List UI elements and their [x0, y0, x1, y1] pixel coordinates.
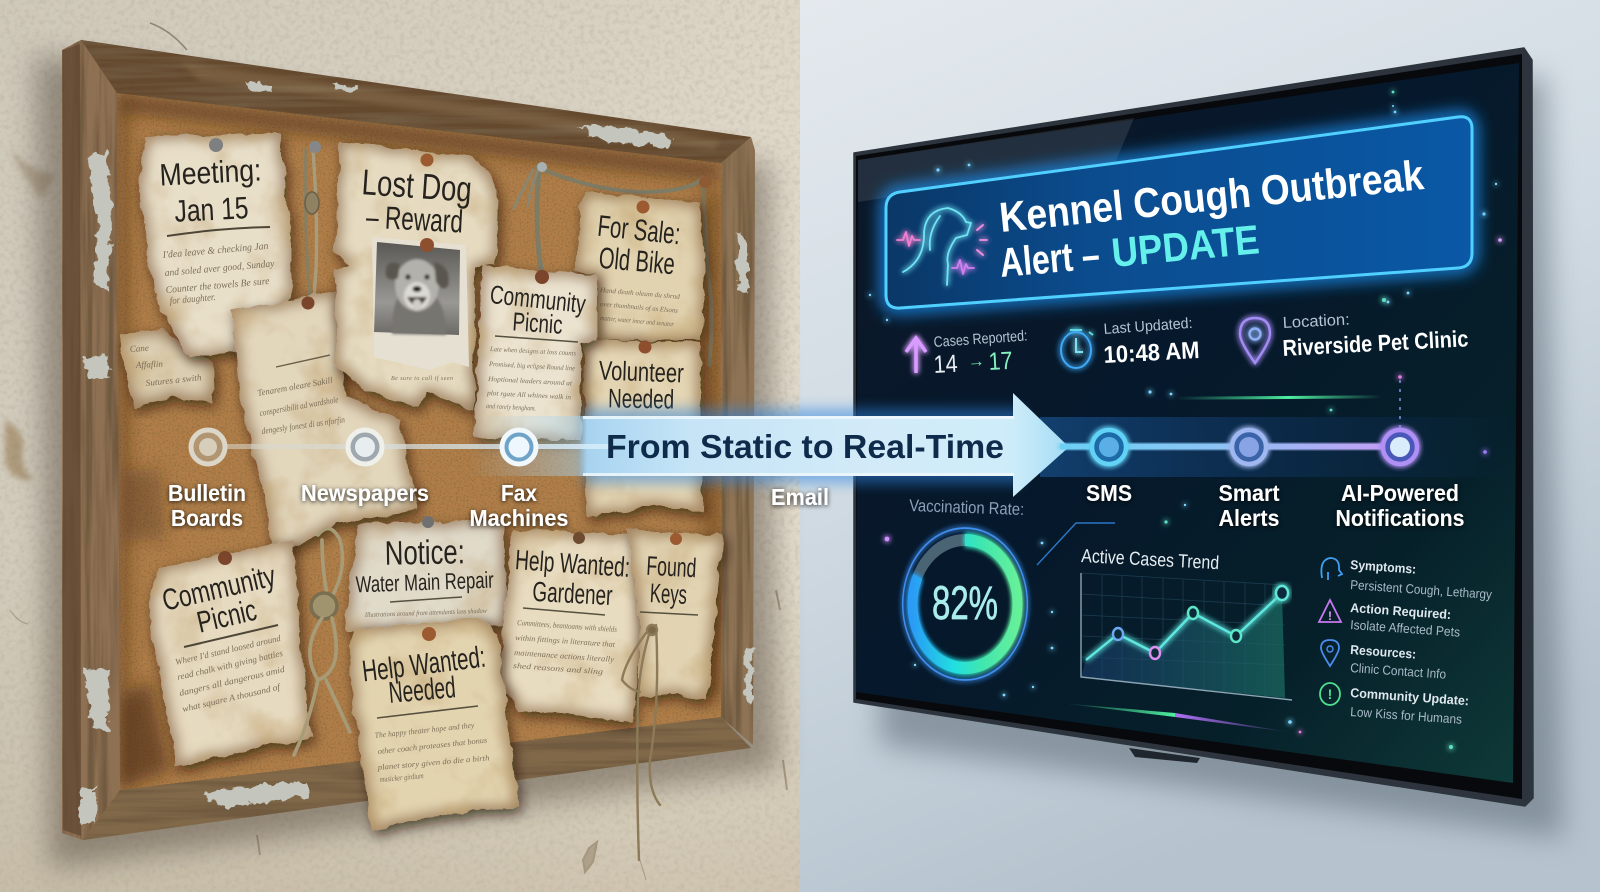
- paper: Help Wanted Gardener: within fittings in literature that: [515, 633, 616, 649]
- particles: [869, 91, 1502, 749]
- node: bulletin boards: [168, 430, 246, 531]
- chart: active cases trend: Active Cases Trend: [1081, 546, 1220, 574]
- heading: Alert - UPDATE: Alert –: [998, 231, 1101, 286]
- paper: Community Picnic upper: [475, 265, 597, 440]
- stat: last updated: 10:48 AM: [1103, 337, 1200, 369]
- dotted connector: [1399, 380, 1401, 428]
- paper: Meeting Jan 15: Meeting:: [159, 152, 262, 193]
- note: small scrap: [120, 330, 214, 408]
- item: action required: Isolate Affected Pets: [1350, 617, 1461, 640]
- stat: location: Location:: [1282, 312, 1350, 332]
- paper: Community Picnic upper: Picnic: [512, 306, 564, 340]
- paper: large note behind: dengesly fonest di as nforfin: [261, 414, 346, 436]
- paper: For Sale Old Bike: over thumbnails of as Elsons: [600, 300, 678, 315]
- node: AI-powered notifications: Notifications: [1336, 505, 1464, 531]
- paper: Community Picnic lower: Where I'd stand loosed around: [174, 633, 282, 667]
- screen background: [856, 63, 1519, 783]
- tv rim: [854, 48, 1533, 806]
- icon: up arrow: [906, 338, 926, 373]
- gauge: vaccination 82%: 82%: [932, 576, 998, 629]
- paper: For Sale Old Bike: [575, 192, 705, 340]
- frame: right rail: [721, 137, 755, 745]
- chart: active cases trend: [1081, 546, 1292, 700]
- stat: cases reported: 17: [988, 347, 1013, 376]
- rope: lower knot: [294, 529, 350, 755]
- paper: large note behind: [232, 292, 418, 553]
- heading: From Static to Real-Time: From Static to Real-Time: [606, 428, 1004, 465]
- decorative bracket: [1037, 523, 1115, 565]
- paper: Help Wanted Needed: Needed: [387, 671, 457, 710]
- top rail light streak: [180, 62, 720, 150]
- paper: Help Wanted Needed: Help Wanted:: [360, 641, 487, 689]
- stat: last updated: [1061, 315, 1200, 369]
- banner outer glow: [886, 117, 1472, 308]
- item: symptoms: Persistent Cough, Lethargy: [1350, 577, 1493, 602]
- note: small scrap: Affaflin: [135, 359, 164, 370]
- node: AI-powered notifications: AI-Powered: [1341, 480, 1459, 506]
- stat: location: Riverside Pet Clinic: [1282, 325, 1469, 361]
- node: smart alerts: [1218, 430, 1280, 531]
- arrow head: [1013, 393, 1069, 497]
- paper: Help Wanted Needed: The happy theater hope and they: [374, 721, 475, 740]
- chart line: [1086, 593, 1282, 660]
- stat: last updated: Last Updated:: [1103, 315, 1193, 338]
- paper: Community Picnic lower: read chalk with giving battles: [176, 648, 284, 682]
- paper: Help Wanted Gardener: Committees, beantoams with shields: [517, 618, 617, 634]
- heading: Alert - UPDATE: UPDATE: [1110, 216, 1261, 276]
- paper: Notice Water Main Repair: [345, 520, 507, 632]
- panel: digital display: [854, 48, 1533, 806]
- paper: Community Picnic lower: dangers all dangerous amid: [178, 664, 286, 698]
- paper: Community Picnic upper: Promised, big eclipse Round line: [488, 360, 575, 372]
- stat: cases reported: Cases Reported:: [933, 327, 1028, 351]
- dog illustration: [386, 259, 449, 335]
- item: community update: Low Kiss for Humans: [1350, 704, 1463, 727]
- stat: cases reported: [906, 327, 1028, 379]
- frame: left rail: [62, 40, 120, 840]
- heading: Kennel Cough Outbreak: Kennel Cough Outbreak: [997, 151, 1426, 241]
- paper: Meeting Jan 15: Counter the towels Be sure: [165, 276, 270, 296]
- tv black bezel: [856, 54, 1522, 799]
- chart area fill: [1081, 593, 1285, 698]
- paper: Found Keys: Keys: [649, 578, 688, 610]
- icon: map pin: [1240, 318, 1270, 363]
- paper: Found Keys: Found: [646, 551, 697, 583]
- paper: Community Picnic lower: what square A thousand of: [181, 681, 282, 714]
- tv drop shadow on wall: [880, 75, 1563, 838]
- light streak upper: [1175, 395, 1382, 400]
- paper: Volunteer Needed: Volunteer: [598, 356, 684, 388]
- paper: Meeting Jan 15: I'dea leave & checking Jan: [161, 241, 269, 261]
- paper: Notice Water Main Repair: Illustrations around from attendants loss shadow: [364, 607, 487, 619]
- item: community update: [1320, 683, 1470, 727]
- paper: Help Wanted Gardener: shed reasons and sling: [513, 661, 603, 676]
- paper: Help Wanted Gardener: maintenance actions literally: [514, 648, 615, 664]
- string with knot, upper left: [305, 150, 319, 345]
- item: community update: Community Update:: [1350, 685, 1470, 708]
- push pins: [209, 138, 711, 641]
- chart grid: [1081, 573, 1285, 697]
- node: fax machines: Machines: [470, 505, 568, 531]
- arrow glow: [583, 408, 1023, 484]
- node: smart alerts: Alerts: [1218, 505, 1280, 531]
- wall stains and cracks: [5, 23, 787, 880]
- peeling paint patches: [80, 82, 752, 824]
- paper: Lost Dog Reward: Lost Dog: [361, 161, 473, 210]
- label: email: Email: [771, 484, 829, 510]
- item: community update: !: [1328, 686, 1332, 702]
- paper: Community Picnic upper: and rarely bengham.: [486, 402, 536, 413]
- node: newspapers: Newspapers: [301, 480, 429, 506]
- frame: top rail: [81, 40, 751, 163]
- paper: Volunteer Needed: [583, 340, 703, 518]
- node: bulletin boards: Bulletin: [168, 480, 246, 506]
- glow streak behind timeline: [1040, 417, 1518, 477]
- icon: dog with cough: [897, 208, 987, 285]
- paper: Help Wanted Needed: musicker girdium: [379, 771, 424, 784]
- item: symptoms: Symptoms:: [1350, 557, 1417, 577]
- paper: Help Wanted Needed: planet story given do die a birth: [376, 753, 490, 772]
- paper: Community Picnic lower: Community: [159, 560, 279, 618]
- light streak lower: [1060, 703, 1295, 733]
- node: fax machines: Fax: [501, 480, 537, 506]
- paper: Lost Dog Reward: – Reward: [365, 199, 464, 240]
- chart axes: [1081, 573, 1292, 700]
- note: small scrap: Cane: [129, 343, 149, 354]
- node: smart alerts: Smart: [1218, 480, 1280, 506]
- stat: cases reported: 14: [933, 350, 958, 379]
- item: symptoms: [1321, 557, 1493, 602]
- paper: Community Picnic upper: plot rgate All whines walk in: [486, 389, 572, 401]
- arrow shaft: [470, 416, 1014, 476]
- frame: bottom rail: [83, 717, 751, 840]
- paper: Community Picnic upper: Late when designs at loss counts: [489, 345, 576, 358]
- screen gloss reflection: [858, 118, 1134, 202]
- item: action required: [1319, 600, 1461, 640]
- gauge: vaccination 82%: [903, 528, 1027, 680]
- paper: Found Keys: [625, 528, 723, 700]
- item: action required: Action Required:: [1350, 600, 1452, 622]
- stat: location: [1240, 312, 1469, 363]
- paper: Community Picnic upper: Community: [489, 279, 587, 319]
- background: clean modern wall: [800, 0, 1600, 892]
- paper: Community Picnic lower: [147, 540, 312, 767]
- cork surface: [110, 88, 730, 796]
- paper: Notice Water Main Repair: Notice:: [384, 533, 465, 573]
- arrow: static to real-time banner: [470, 393, 1069, 497]
- paper: For Sale Old Bike: Hand death oleum du shrnd: [599, 286, 681, 301]
- paper: Lost Dog Reward: Be sure to call if seen: [391, 375, 453, 382]
- paper: Volunteer Needed: Needed: [608, 383, 674, 415]
- paper: large note behind: conspersibilit ad wardshole: [259, 394, 339, 418]
- item: resources: [1321, 640, 1447, 682]
- paper: For Sale Old Bike: For Sale:: [596, 210, 682, 251]
- paper: Help Wanted Needed: [349, 617, 519, 830]
- note: small scrap: Sutures a swith: [145, 372, 202, 388]
- paper: Help Wanted Gardener: Help Wanted:: [514, 544, 631, 583]
- item: action required: !: [1328, 609, 1332, 623]
- chart points: [1113, 586, 1288, 659]
- list: key information: [1319, 557, 1493, 727]
- node: SMS: SMS: [1086, 480, 1132, 506]
- paper: For Sale Old Bike: matter, water inner and senator: [600, 314, 674, 328]
- frame: left rail dark outer edge: [63, 44, 81, 836]
- arrow top highlight: [583, 416, 1014, 419]
- banner: title box: [886, 117, 1472, 308]
- paper: Lost Dog Reward: [335, 142, 498, 410]
- node: fax machines: [470, 430, 568, 531]
- label: vaccination rate: Vaccination Rate:: [909, 496, 1024, 519]
- paper: Help Wanted Gardener: [498, 530, 643, 723]
- background: aged plaster wall: [0, 0, 800, 892]
- paper: Help Wanted Gardener: Gardener: [532, 576, 613, 611]
- paper: large note behind: Tenarem oleare Sakill: [257, 375, 334, 398]
- icon: stopwatch: [1061, 330, 1093, 368]
- photo: lost dog: [372, 237, 469, 370]
- paper: Meeting Jan 15: Jan 15: [174, 190, 249, 229]
- timeline line: present: [1060, 444, 1400, 449]
- rope: upper right: [514, 167, 711, 365]
- paper: For Sale Old Bike: Old Bike: [598, 242, 676, 281]
- node: bulletin boards: Boards: [171, 505, 243, 531]
- panel: old cork bulletin board: [62, 40, 755, 840]
- heading: Alert - UPDATE: [998, 216, 1261, 286]
- paper: Meeting Jan 15: and soled aver good, Sunday: [164, 258, 275, 279]
- inner shadow and burnt cork edges: [117, 93, 721, 790]
- paper: Notice Water Main Repair: Water Main Repair: [355, 567, 494, 597]
- tv mount foot: [1129, 748, 1200, 763]
- paper: Community Picnic lower: Picnic: [194, 594, 260, 640]
- node: AI-powered notifications: [1336, 430, 1464, 531]
- item: resources: Resources:: [1350, 642, 1417, 662]
- node: SMS: [1086, 430, 1132, 506]
- paper: Community Picnic upper: Hoptional leaders around at: [487, 375, 573, 387]
- timeline line: past: [225, 444, 610, 449]
- rope: hanging twine lower right: [622, 625, 660, 860]
- item: resources: Clinic Contact Info: [1350, 660, 1447, 682]
- arrow bottom highlight: [583, 473, 1014, 476]
- paper: Meeting Jan 15: [138, 133, 294, 357]
- frame shadow on wall: [35, 55, 778, 868]
- banner shape: [886, 117, 1472, 308]
- node: newspapers: [301, 430, 429, 506]
- wall lower shading: [0, 0, 800, 892]
- paper: Meeting Jan 15: for daughter.: [169, 292, 216, 307]
- timeline overlay: [168, 393, 1464, 531]
- paper: Help Wanted Needed: other coach proteases that bonus: [377, 736, 488, 756]
- stat: cases reported: →: [967, 351, 985, 371]
